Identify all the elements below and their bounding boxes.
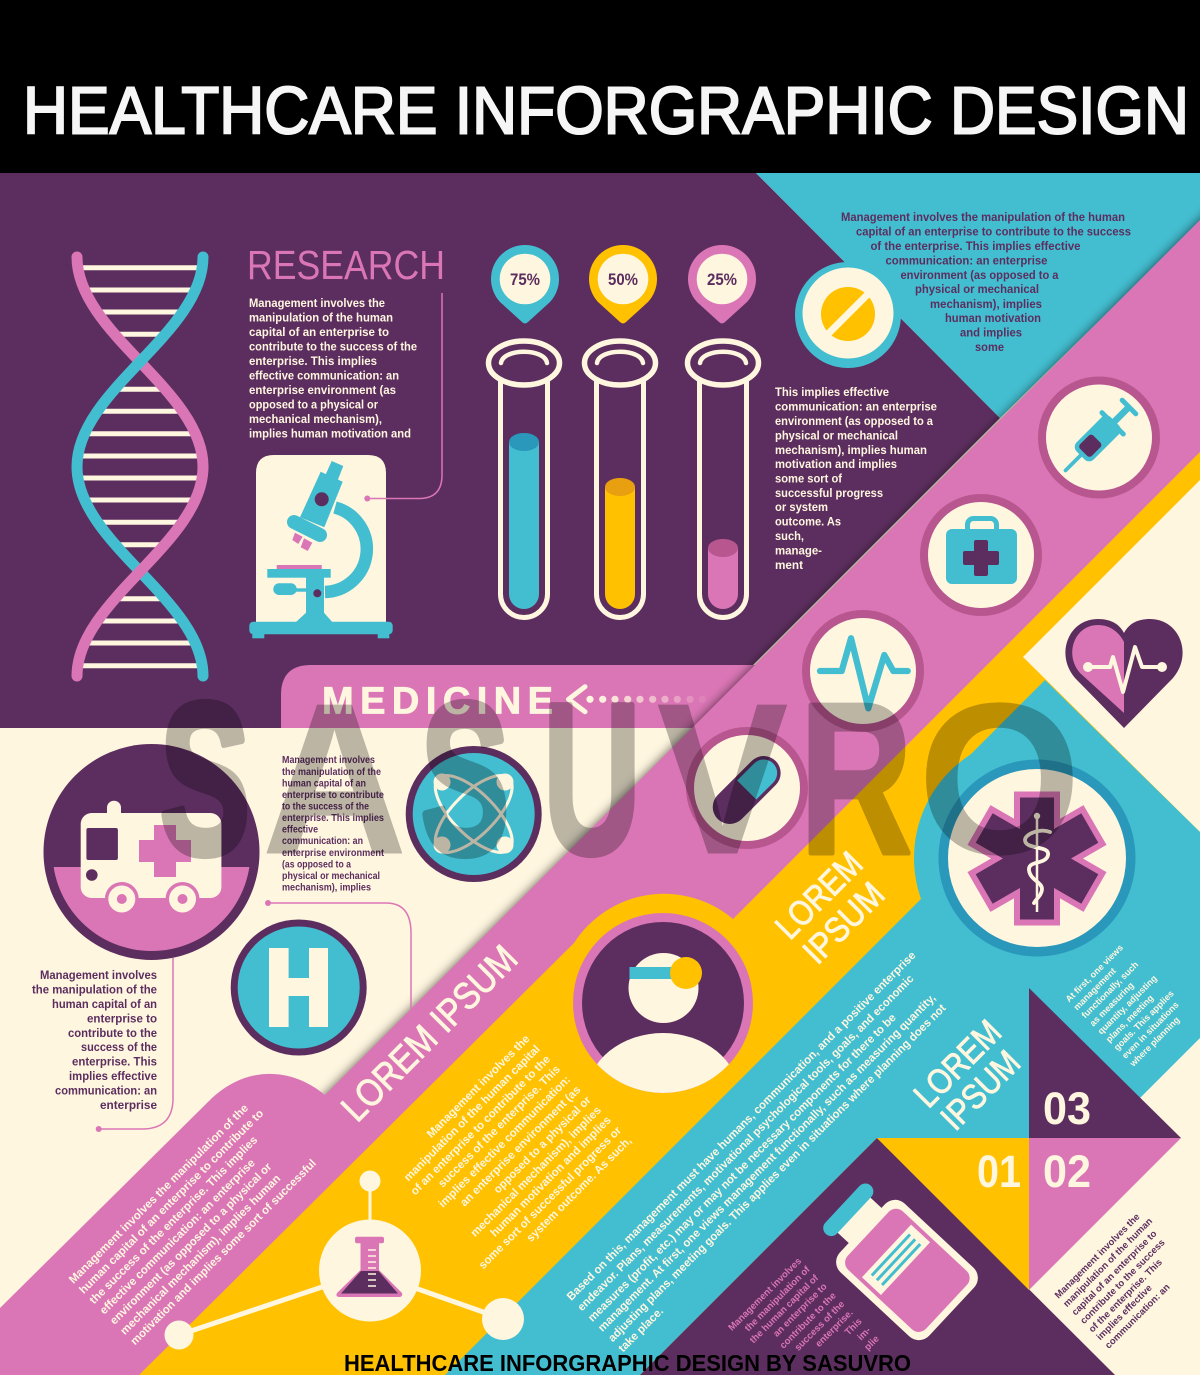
text block: cyan right strip: where planning [1127,1015,1182,1069]
text block: purple triangle: success of the [793,1299,847,1353]
text block: yellow band: human motivation and implies [489,1114,614,1240]
pin: 50% [589,245,657,324]
icon: flask network [164,1170,524,1350]
panel: cyan diagonal band [445,680,1200,1375]
icon: heart with pulse [1065,619,1183,728]
text block: yellow band: system outcome. As such, [525,1135,634,1245]
text block: yellow band: of an enterprise to contribute to the [409,1054,553,1198]
text block: cyan right strip: quantity, adjusting [1096,973,1159,1036]
text block: pink lower left: environment (as opposed to a physical or [108,1161,275,1327]
text block: cyan band long: measures (profit, etc.) may or may not be necessary components for there to be [586,1012,899,1324]
text block: research: Management involves the [249,296,385,310]
watermark: V [657,658,788,899]
test tube: 25% pink [688,341,758,617]
shadow of pink band [322,213,1200,1106]
text block: yellow band: mechanical mechanism), implies [469,1105,604,1240]
text block: purple right column: This implies effective [775,385,889,399]
text block: cyan right strip: goals. This applies [1112,988,1176,1052]
icon: pulse monitor [802,610,924,732]
text block: purple right column: ment [775,558,803,572]
icon: star of life [938,760,1136,956]
text block: purple triangle: an enterprise to [771,1281,830,1339]
panel: cream right triangle [1023,480,1200,832]
text block: cyan band long: adjusting plans, meeting goals. This applies even in situations where planning does not [606,1002,949,1345]
text block: under ambulance: success of the [81,1040,157,1054]
header band [0,0,1200,173]
text block: purple right column: such, [775,529,804,543]
leader line: ambulance [96,958,173,1132]
text block: under ambulance: human capital of an [52,997,157,1011]
text block: pink lower left: motivation and implies some sort of successful [129,1158,319,1348]
text block: cyan corner: mechanism), implies [930,297,1042,311]
text block: pink lower left: Management involves the manipulation of the [67,1102,251,1286]
text block: cyan corner: and implies [960,326,1022,340]
panel: purple research background [0,173,1000,728]
text block: cyan corner: communication: an enterprise [886,254,1048,268]
text block: pink lower left: human capital of an enterprise to contribute to [77,1108,266,1296]
text block: under ambulance: enterprise to [87,1012,157,1026]
text block: research: effective communication: an [249,368,399,382]
text block: research: contribute to the success of the [249,340,417,354]
text block: cyan corner: environment (as opposed to a [900,268,1059,282]
text block: purple triangle: enterprise. [813,1307,856,1350]
pin: 25%: 25% [707,270,737,289]
text block: purple right column: or system [775,500,828,514]
text block: research: capital of an enterprise to [249,325,389,339]
leader line: research [364,293,442,502]
text block: yellow band: manipulation of the human capital [402,1043,543,1184]
text block: cream bottom right [1053,1207,1197,1351]
text block: purple triangle: Management involves [726,1256,804,1333]
pin: 50%: 50% [608,270,638,289]
text block: purple right column: outcome. As [775,514,841,528]
heading: lorem ipsum pink band: LOREM IPSUM [334,938,526,1130]
text block: purple right column: mechanism), implies human [775,443,927,457]
text block: beside ambulance: human capital of an [282,778,366,790]
heading: research: RESEARCH [247,242,445,288]
panel: cyan circle behind star [914,735,1160,981]
heading: lorem ipsum cyan band: IPSUM [933,1043,1028,1138]
text block: under ambulance: the manipulation of the [32,982,157,996]
icon: hospital H [231,920,367,1056]
heading: medicine: MEDICINE [322,680,553,722]
diagram: numbered triangles [877,988,1181,1290]
icon: syringe [1038,376,1160,498]
text block: purple triangle: This [843,1316,864,1338]
text block: purple triangle: plie [862,1334,882,1353]
text block: cream bottom right: communication: an [1103,1282,1173,1351]
watermark: S [421,658,509,899]
text block: under ambulance [32,968,157,1112]
text block: beside ambulance: Management involves [282,754,375,766]
text block: research [249,296,417,440]
text block: beside ambulance: (as opposed to a [282,858,351,870]
panel: cyan top corner [756,173,1200,418]
text block: cyan right strip: functionally, such [1080,960,1140,1020]
text block: beside ambulance: to the success of the [282,800,369,812]
icon: person with head mirror [573,913,753,1093]
arrow: medicine dots [568,687,706,712]
watermark: O [918,658,1081,899]
text block: cream bottom right: contribute to the success [1078,1237,1167,1327]
watermark: A [262,658,407,899]
heading: lorem ipsum yellow band: IPSUM [795,875,892,972]
text block: purple triangle: im- [855,1325,873,1343]
heading: lorem ipsum yellow band: LOREM [768,844,870,947]
icon: atom [406,746,542,882]
icon: ambulance [44,744,260,960]
text block: cyan right strip: as measuring [1088,980,1136,1028]
text block: cyan corner: of the enterprise. This implies effective [870,239,1081,253]
panel: purple bottom triangle [640,1138,1115,1375]
text block: research: implies human motivation and [249,426,411,440]
text block: cyan band long: Based on this, management must have humans, communication, and a positive enterprise [565,950,919,1303]
heading: lorem ipsum cyan band [907,1013,1034,1140]
text block: yellow band: Management involves the [425,1033,532,1141]
text block: cyan right strip: management [1072,966,1118,1012]
text block: pink lower left [67,1096,319,1348]
text block: yellow band: success of the enterprise. This [436,1063,563,1190]
text block: purple right column: communication: an enterprise [775,400,937,414]
text block: cyan corner: physical or mechanical [915,282,1039,296]
text block: cyan corner: some [975,340,1004,354]
text block: under ambulance: communication: an [55,1084,157,1098]
text block: cyan right strip: At first, one views [1063,943,1125,1004]
text block: cyan corner [841,210,1131,354]
text block: beside ambulance [282,754,384,894]
pin: 75%: 75% [510,270,540,289]
text block: under ambulance: enterprise. This [72,1054,157,1068]
icon: microscope [249,455,393,638]
pin: 75% [491,245,559,324]
text block: purple triangle [726,1255,882,1375]
text block: beside ambulance: physical or mechanical [282,870,380,882]
text block: beside ambulance: effective [282,824,318,836]
diagram: numbered triangles: 02 [1043,1146,1091,1197]
test tube: 50% yellow [584,341,656,617]
text block: beside ambulance: the manipulation of the [282,766,381,778]
leader line: H badge [265,900,411,1009]
text block: beside ambulance: enterprise environment [282,847,384,859]
text block: pink lower left: mechanical mechanism), implies human [118,1173,283,1337]
text block: purple triangle: contribute to the [778,1290,839,1351]
icon: DNA helix [77,257,203,676]
test tube: 75% cyan [488,341,560,617]
text block: cyan right strip: even in situations [1120,1000,1181,1061]
text block: purple right column: manage- [775,544,822,558]
text block: beside ambulance: enterprise. This implies [282,812,384,824]
text block: under ambulance: contribute to the [68,1026,157,1040]
text block: cyan band long: endeavor. Plans, measurements, motivational psychological tools, goals, and economic [576,973,917,1314]
text block: research: mechanical mechanism), [249,412,382,426]
text block: purple right column: environment (as opposed to a [775,414,933,428]
text block: research: enterprise. This implies [249,354,377,368]
icon: pill badge [795,262,901,368]
text block: research: enterprise environment (as [249,383,396,397]
text block: beside ambulance: enterprise to contribute [282,789,384,801]
panel: yellow diagonal band [139,452,1200,1375]
heading: lorem ipsum yellow band [768,844,897,973]
text block: cyan corner: Management involves the manipulation of the human [841,210,1125,224]
text block: cream bottom right: Management involves the [1053,1212,1142,1301]
text block: yellow band: opposed to a physical or [492,1094,594,1196]
text block: cream bottom right: capital of an enterprise to [1070,1228,1160,1318]
text block: purple right column [775,385,937,572]
watermark: U [543,658,641,899]
icon: medical kit [920,494,1042,616]
text block: yellow band: implies effective communication: [437,1074,573,1210]
text block: cyan corner: capital of an enterprise to contribute to the success [856,224,1131,238]
text block: pink lower left: effective communication: an enterprise [98,1157,258,1317]
text block: research: manipulation of the human [249,310,393,324]
text block: purple right column: physical or mechanical [775,428,898,442]
text block: cyan band long: management. At first, one views management functionally, such as measuring quantity, [596,992,938,1334]
text block: under ambulance: enterprise [100,1098,157,1112]
text block: purple triangle: the human capital of [748,1272,822,1346]
text block: beside ambulance: mechanism), implies [282,882,371,894]
text block: yellow band [385,1033,635,1282]
text block: beside ambulance: communication: an [282,835,363,847]
text block: purple right column: motivation and implies [775,457,897,471]
text block: cyan right strip: plans, meeting [1104,993,1155,1044]
text block: pink lower left: the success of the enterprise. This implies [88,1134,260,1307]
panel: medicine tab [281,665,770,728]
heading: lorem ipsum cyan band: LOREM [907,1013,1009,1115]
diagram: numbered triangles: 03 [1043,1083,1091,1134]
icon: capsule [686,727,808,849]
text block: yellow band: some sort of successful progress or [477,1124,624,1272]
text block: purple right column: successful progress [775,486,883,500]
text block: yellow band: an enterprise environment (as [458,1084,583,1209]
text block: cream bottom right: of the enterprise. This [1087,1257,1165,1335]
text block: cyan band long: take place. [617,1305,666,1355]
text block: purple triangle: the manipulation of [743,1264,813,1334]
icon: medicine bottle [814,1178,984,1346]
text block: under ambulance: implies effective [69,1069,157,1083]
text block: cream bottom right: implies effective [1095,1283,1155,1343]
text block: research: opposed to a physical or [249,398,378,412]
text block: purple right column: some sort of [775,472,843,486]
text block: cyan corner: human motivation [945,311,1041,325]
text block: under ambulance: Management involves [40,968,157,982]
watermark: S [160,658,250,899]
diagram: numbered triangles: 01 [977,1146,1021,1197]
text block: cyan right strip [1063,940,1192,1069]
watermark: R [800,658,912,899]
pin: 25% [688,245,756,324]
text block: cream bottom right: manipulation of the human [1061,1216,1155,1310]
